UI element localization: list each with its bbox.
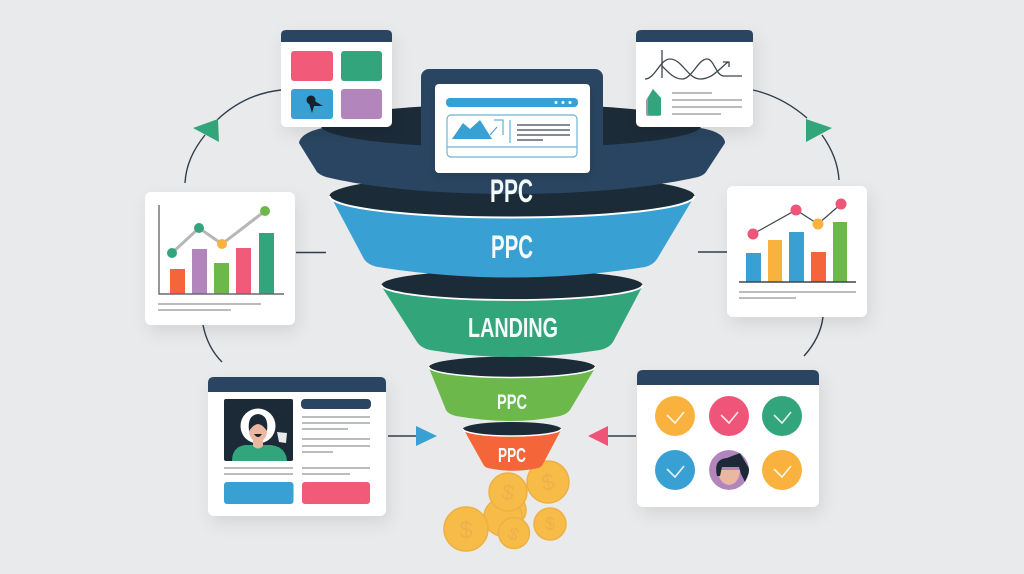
arrow: pink into funnel [588, 426, 608, 446]
coins: $ [505, 523, 522, 545]
trend line [748, 198, 846, 240]
trend line [167, 206, 270, 258]
icon: tag [646, 89, 661, 116]
page text lines [517, 125, 570, 140]
funnel tier 5: orange: PPC [498, 445, 526, 467]
card: left bar and line chart [145, 192, 295, 325]
card: right bar and line chart [727, 186, 867, 317]
coins: $ [539, 468, 557, 496]
funnel tier 4: lime: PPC [497, 391, 527, 414]
browser bar [446, 98, 578, 107]
icon: cursor badge [306, 96, 323, 113]
arrow: top right green [806, 119, 832, 142]
coins: $ [459, 517, 473, 544]
funnel tier 5: orange [463, 422, 561, 471]
card: top left tiles [281, 30, 392, 127]
funnel tier 3: green landing [382, 270, 642, 357]
coins: $ [545, 514, 555, 534]
monitor with landing page [421, 69, 603, 173]
funnel tier 2: blue [330, 174, 694, 278]
funnel tier 4: lime [429, 356, 595, 421]
bars [746, 222, 847, 282]
arrow: blue into funnel [416, 426, 437, 446]
coins: $ [499, 479, 516, 506]
connector arcs and lines [185, 90, 839, 436]
funnel tier 1: navy brim: PPC [490, 173, 533, 209]
button: pink [302, 482, 370, 504]
page frame [447, 115, 577, 157]
mountain image [452, 120, 492, 139]
arrow: top left green [193, 119, 219, 142]
funnel tier 1: navy brim [299, 104, 725, 209]
funnel tier 3: green landing: LANDING [468, 312, 558, 343]
check marks [667, 412, 791, 477]
photo: smiling person [224, 399, 293, 461]
card: top right line chart [636, 30, 753, 127]
bars [170, 233, 274, 294]
infographic: PPC funnel [145, 30, 872, 552]
card: bottom right check grid [637, 370, 819, 507]
button: blue [224, 482, 294, 504]
avatar [709, 450, 750, 490]
coins [444, 461, 569, 551]
card: bottom left profile [208, 377, 386, 516]
funnel tier 2: blue: PPC [491, 229, 533, 265]
